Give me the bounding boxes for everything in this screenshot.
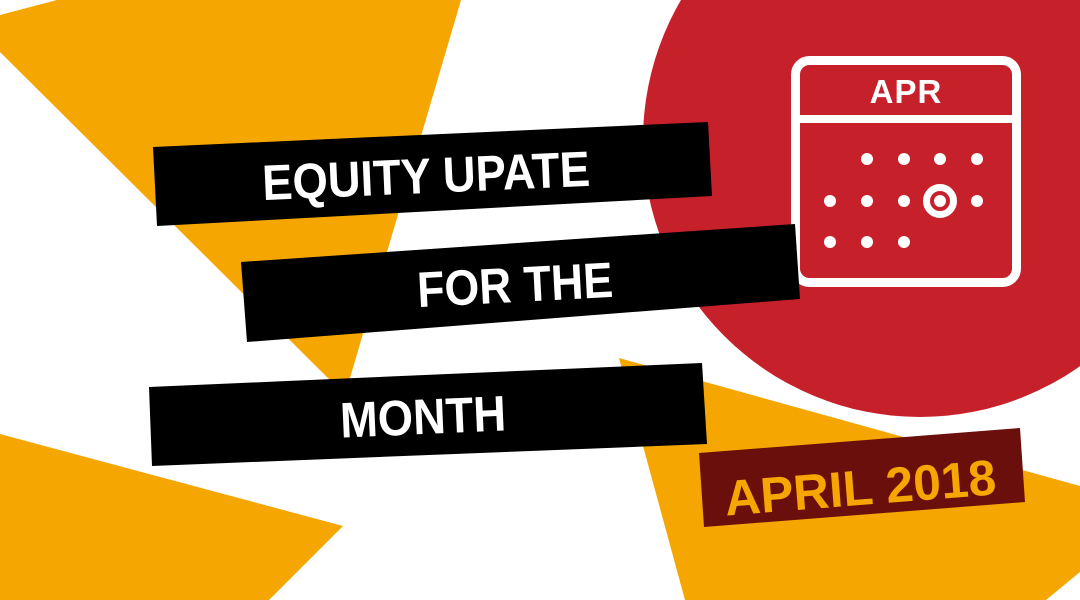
shape: bottom-left orange triangle	[0, 434, 343, 600]
banner: EQUITY UPATE	[153, 122, 712, 226]
label: APRIL 2018	[699, 428, 1025, 527]
shape: bottom-right orange quad	[619, 358, 1080, 600]
icon: calendar	[796, 60, 1016, 282]
icon: calendar: APR	[870, 73, 942, 110]
banner: FOR THE	[241, 224, 800, 342]
banner: FOR THE: FOR THE	[416, 252, 614, 318]
label: APRIL 2018: APRIL 2018	[722, 449, 998, 527]
shape: red circle	[643, 0, 1080, 417]
banner: MONTH: MONTH	[339, 385, 507, 449]
banner: EQUITY UPATE: EQUITY UPATE	[261, 141, 591, 211]
shape: top-left orange triangle	[0, 0, 461, 395]
banner: MONTH	[149, 363, 707, 466]
